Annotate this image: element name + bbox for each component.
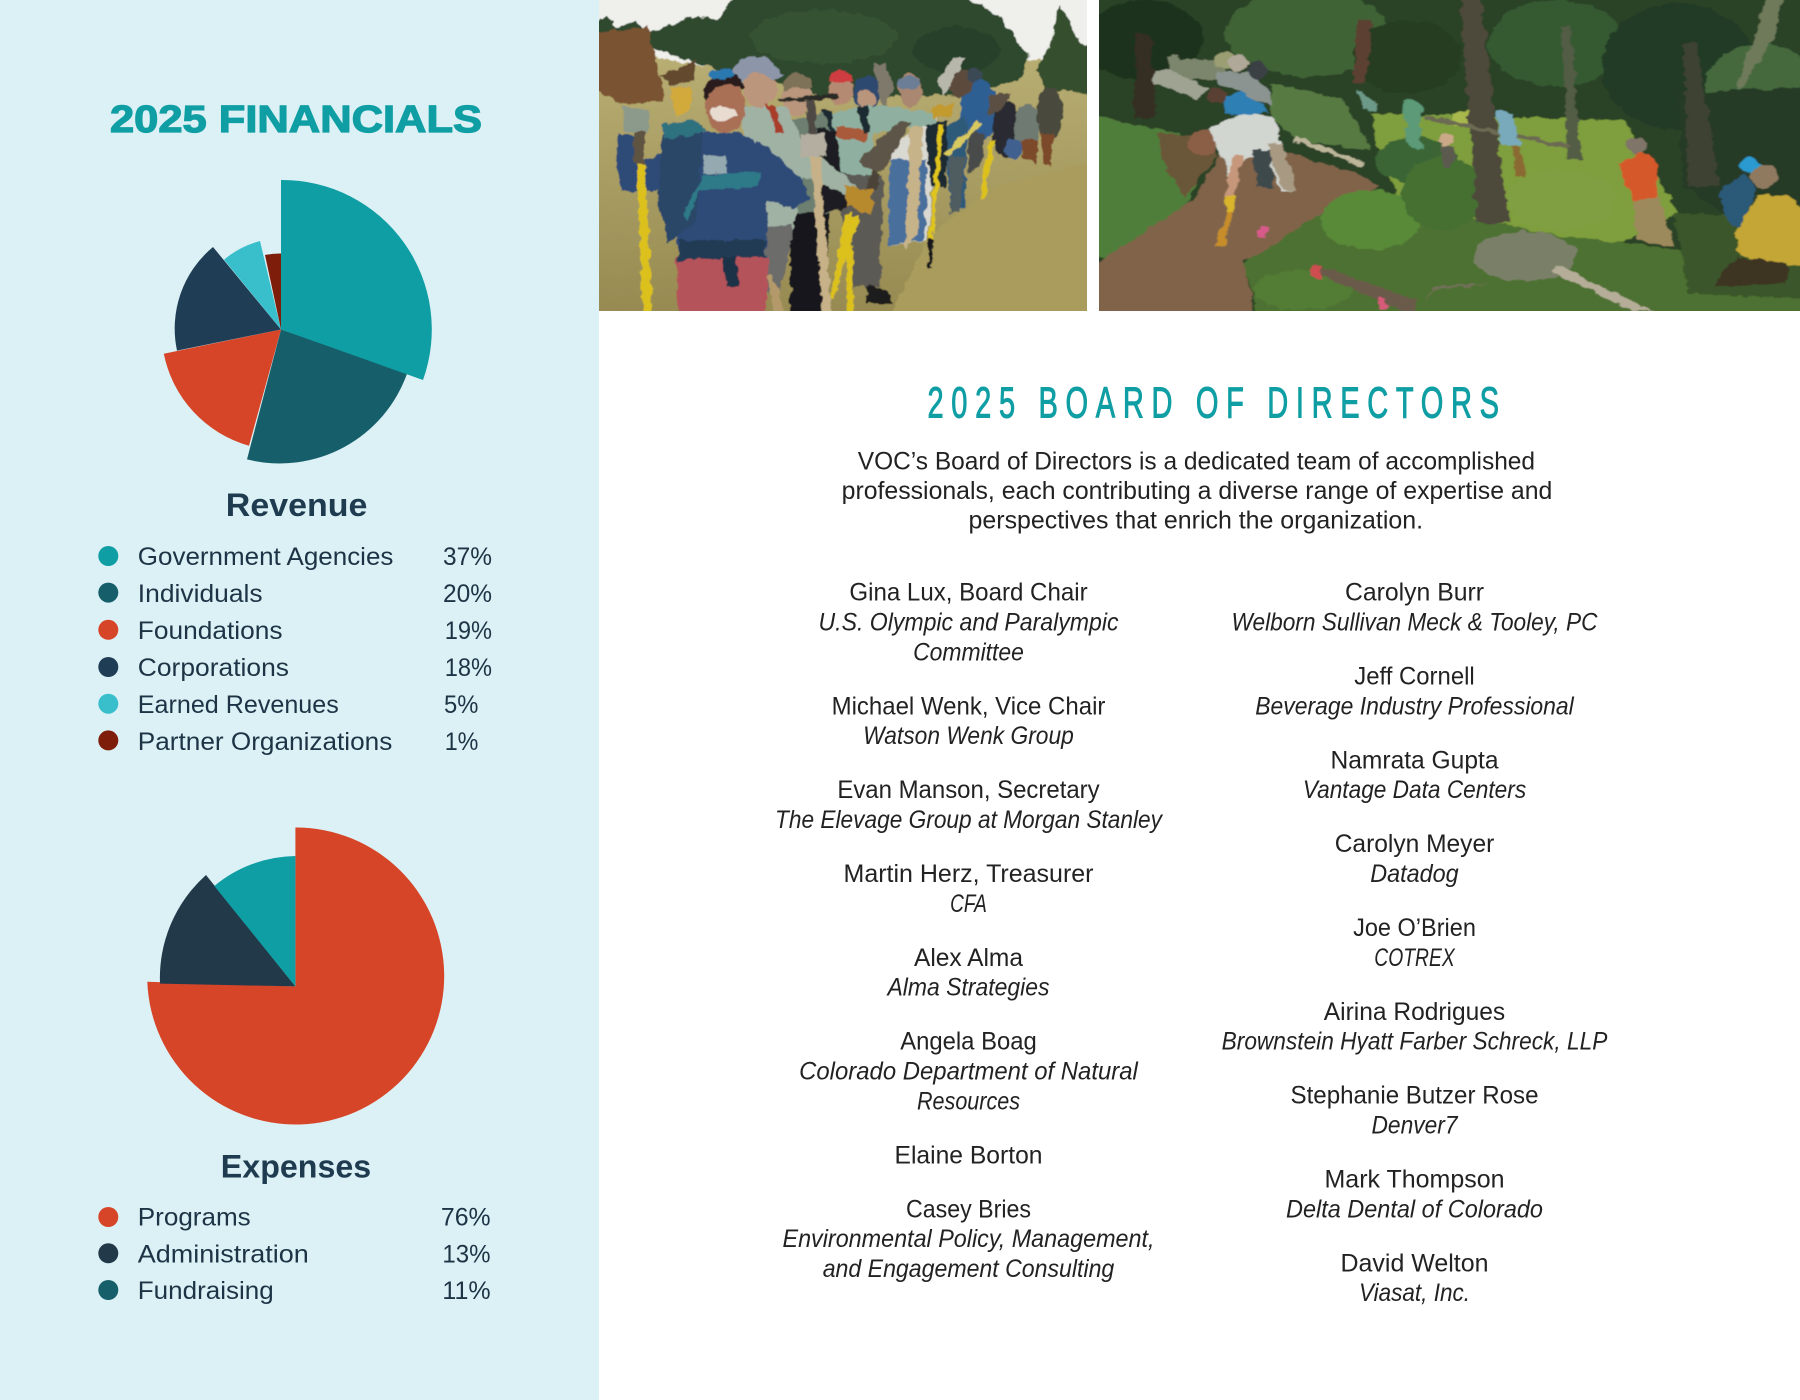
revenue legend: Government Agencies bbox=[138, 543, 393, 571]
board list: right column: Mark Thompson bbox=[1324, 1166, 1504, 1194]
board list: right column: Carolyn Meyer bbox=[1335, 830, 1494, 858]
expenses legend: 76% bbox=[441, 1204, 491, 1232]
heading: expenses: Expenses bbox=[221, 1148, 371, 1184]
revenue legend: Individuals bbox=[138, 580, 263, 608]
board list: left column: The Elevage Group at Morgan Stanley bbox=[775, 806, 1163, 834]
board list: right column: Vantage Data Centers bbox=[1303, 776, 1526, 804]
board list: left column: Resources bbox=[917, 1087, 1020, 1115]
board list: right column: Viasat, Inc. bbox=[1359, 1279, 1470, 1307]
revenue legend: 19% bbox=[445, 617, 492, 645]
board list: right column: Denver7 bbox=[1372, 1112, 1458, 1140]
board list: left column: Gina Lux, Board Chair bbox=[849, 579, 1088, 607]
board list: left column: Elaine Borton bbox=[894, 1141, 1042, 1169]
board list: left column: Martin Herz, Treasurer bbox=[844, 860, 1094, 888]
revenue legend: 20% bbox=[443, 580, 492, 608]
revenue legend: 5% bbox=[444, 691, 478, 719]
board list: left column: Watson Wenk Group bbox=[863, 722, 1074, 750]
board list: left column: Environmental Policy, Management, bbox=[782, 1225, 1154, 1253]
photo: crew building a trail in the forest bbox=[1076, 0, 1800, 330]
board list: right column: Delta Dental of Colorado bbox=[1286, 1195, 1543, 1223]
photo: volunteers lined up holding tools bbox=[599, 0, 1087, 311]
revenue legend: Corporations bbox=[138, 654, 289, 682]
revenue legend: Earned Revenues bbox=[138, 691, 339, 719]
revenue pie chart bbox=[164, 180, 432, 463]
intro paragraph: VOC’s Board of Directors is a dedicated team of accomplished bbox=[858, 448, 1535, 476]
far row of people bbox=[960, 78, 997, 142]
person: red cap bbox=[830, 104, 937, 176]
fallen logs bbox=[1294, 137, 1366, 167]
board list: right column: Jeff Cornell bbox=[1354, 662, 1475, 690]
expenses legend: 13% bbox=[442, 1240, 491, 1268]
board list: left column: Michael Wenk, Vice Chair bbox=[832, 692, 1105, 720]
heading: revenue: Revenue bbox=[226, 487, 367, 523]
front person bbox=[616, 132, 810, 260]
board list: left column: U.S. Olympic and Paralympic bbox=[818, 608, 1119, 636]
board list: right column: Airina Rodrigues bbox=[1324, 998, 1505, 1026]
expenses legend: Programs bbox=[138, 1204, 251, 1232]
panel: board of directors bbox=[775, 377, 1608, 1307]
heading: 2025 financials: 2025 FINANCIALS bbox=[110, 99, 482, 141]
person: tan hat bbox=[780, 86, 813, 116]
board list: right column: Stephanie Butzer Rose bbox=[1290, 1082, 1538, 1110]
board list: right column: Datadog bbox=[1370, 860, 1459, 888]
panel background bbox=[0, 0, 599, 1400]
board list: right column: Joe O’Brien bbox=[1353, 914, 1476, 942]
board list: right column: Brownstein Hyatt Farber Schreck, LLP bbox=[1222, 1028, 1608, 1056]
revenue legend: 1% bbox=[445, 728, 478, 756]
board list: left column: CFA bbox=[950, 890, 987, 918]
board list: left column: Colorado Department of Natural bbox=[799, 1058, 1139, 1086]
expenses legend: Fundraising bbox=[138, 1277, 274, 1305]
panel: financials bbox=[0, 0, 599, 1400]
board list: right column: Welborn Sullivan Meck & Tooley, PC bbox=[1232, 608, 1598, 636]
intro paragraph bbox=[842, 448, 1552, 534]
board list: right column bbox=[1222, 579, 1608, 1307]
revenue legend: 18% bbox=[445, 654, 492, 682]
board list: right column: Carolyn Burr bbox=[1345, 579, 1484, 607]
board list: left column: Casey Bries bbox=[906, 1195, 1031, 1223]
expenses legend: 11% bbox=[442, 1277, 491, 1305]
person: jeans bbox=[890, 117, 937, 247]
revenue legend: Partner Organizations bbox=[138, 728, 392, 756]
intro paragraph: professionals, each contributing a diverse range of expertise and bbox=[842, 477, 1552, 505]
expenses pie chart bbox=[147, 827, 444, 1124]
board list: left column: Alma Strategies bbox=[886, 974, 1050, 1002]
tree trunks bbox=[1459, 0, 1509, 223]
board list: right column: David Welton bbox=[1340, 1249, 1488, 1277]
board list: right column: Namrata Gupta bbox=[1330, 746, 1499, 774]
expenses legend: Administration bbox=[138, 1240, 309, 1268]
board list: right column: Beverage Industry Professional bbox=[1255, 692, 1575, 720]
board list: right column: COTREX bbox=[1374, 944, 1456, 972]
board list: left column: Alex Alma bbox=[914, 944, 1023, 972]
board list: left column: Evan Manson, Secretary bbox=[837, 776, 1100, 804]
revenue legend: Foundations bbox=[138, 617, 282, 645]
intro paragraph: perspectives that enrich the organization. bbox=[969, 506, 1423, 534]
handles bbox=[807, 100, 817, 133]
expenses legend bbox=[98, 1204, 491, 1305]
revenue legend bbox=[98, 543, 492, 756]
person: bucket hat bbox=[737, 107, 857, 230]
board list: left column bbox=[775, 579, 1163, 1283]
revenue legend: 37% bbox=[443, 543, 492, 571]
trail crew bbox=[1208, 112, 1296, 192]
heading: 2025 board of directors: 2025 BOARD OF DIRECTORS bbox=[928, 377, 1499, 427]
board list: left column: Committee bbox=[913, 638, 1024, 666]
board list: left column: Angela Boag bbox=[900, 1028, 1037, 1056]
board list: left column: and Engagement Consulting bbox=[823, 1255, 1114, 1283]
